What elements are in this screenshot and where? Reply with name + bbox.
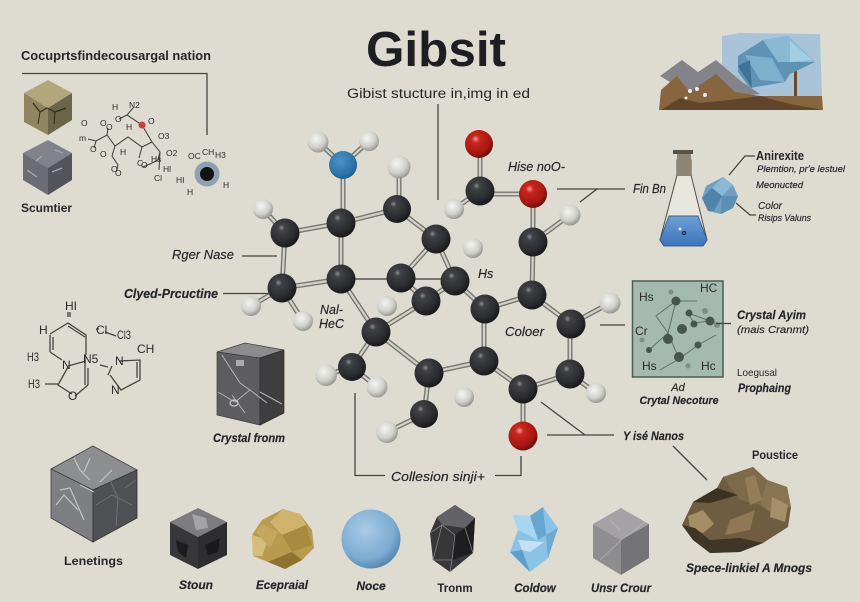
nitrogen atom <box>329 151 357 179</box>
subtitle with leader line: Gibist stucture in,img in ed <box>347 86 530 101</box>
mineral: blue crystal <box>510 507 558 572</box>
diagram: structural formula <box>79 100 178 183</box>
label: Ad Crytal Necoture: Ad <box>670 382 686 394</box>
diagram: structural formula: H <box>112 102 118 112</box>
title: Gibsit <box>366 23 506 77</box>
label: Lenetings: Lenetings <box>64 554 123 568</box>
diagram: structural formula: O <box>90 144 97 154</box>
label: Rger Nase: Rger Nase <box>172 247 234 262</box>
icon: laboratory flask <box>660 150 707 246</box>
diagram: central molecule <box>241 130 620 450</box>
diagram: structural formula: O <box>100 149 107 159</box>
label: Loegusal Prophaing: Prophaing <box>738 383 791 395</box>
leader line to diagram <box>600 324 625 326</box>
label: Y ist Nanos with leaders <box>541 402 707 480</box>
label: Coldow: Coldow <box>514 583 557 595</box>
label: Tronm: Tronm <box>437 583 473 595</box>
panel: molecular crystal diagram: HC <box>700 281 718 295</box>
label: Poustice: Poustice <box>752 450 798 462</box>
panel: molecular crystal diagram: Hs <box>639 290 654 304</box>
icon: dark atom with labels: H3 <box>215 150 226 160</box>
leader line to Fin Bn <box>557 189 625 202</box>
label: Scumtier: Scumtier <box>21 201 72 215</box>
label: Noce: Noce <box>356 579 386 593</box>
label: Crystal Ayim: (mais Cranmt) <box>737 324 809 336</box>
diagram: structural formula: O <box>81 118 88 128</box>
panel: left structural formula: N <box>111 383 120 397</box>
mineral: blue sphere <box>342 510 400 568</box>
label: Coloer: Coloer <box>505 324 545 339</box>
diagram: structural formula: O2 <box>166 148 178 158</box>
panel: molecular crystal diagram: Cr <box>635 324 648 338</box>
labels: mineral properties: Color <box>758 200 782 212</box>
icon: dark atom with labels: H <box>223 180 229 190</box>
diagram: structural formula: Hs <box>151 154 161 164</box>
mineral: dark cube <box>170 508 227 569</box>
diagram: structural formula: N2 <box>129 100 140 110</box>
label: Collesion sinji+ with bracket: Collesion sinji+ <box>391 469 485 484</box>
diagram: structural formula: H <box>126 122 132 132</box>
panel: left structural formula: O <box>68 389 77 403</box>
icon: grey mineral cube <box>23 140 72 195</box>
diagram: structural formula: O <box>106 122 113 132</box>
labels: mineral properties: Anirexite <box>756 149 804 163</box>
panel: left structural formula: H3 <box>27 350 39 364</box>
panel: left structural formula: N <box>62 358 71 372</box>
diagram: structural formula: H <box>120 147 126 157</box>
icon: tan mineral cube <box>24 80 72 135</box>
icon: dark atom with labels: H <box>187 187 193 197</box>
label: Fin Bn: Fin Bn <box>633 182 666 196</box>
diagram: structural formula: O <box>115 114 122 124</box>
labels: mineral properties: Plemtion, pr'e lestuel <box>757 164 846 175</box>
label: Ecepraial: Ecepraial <box>256 580 309 592</box>
label: Nal-HeC: Nal- <box>320 303 343 317</box>
panel: molecular crystal diagram: Hc <box>701 359 716 373</box>
label: Hs: Hs <box>478 267 493 281</box>
label: Collesion sinji+ with bracket <box>355 393 521 484</box>
bonds <box>251 141 610 436</box>
diagram: structural formula: O <box>111 164 118 174</box>
icon: dark atom with labels: HI <box>176 175 184 185</box>
icon: blue crystal tree <box>738 36 815 88</box>
mineral: grey hexagonal cube <box>593 508 649 575</box>
hydrogen atoms <box>241 131 620 443</box>
panel: molecular crystal diagram <box>632 281 723 377</box>
label: Stoun: Stoun <box>179 578 213 592</box>
heading: composition <box>21 49 211 135</box>
label: Loegusal Prophaing <box>737 367 791 395</box>
panel: left structural formula: Cl3 <box>117 328 131 342</box>
icon: dark atom with labels: OC <box>188 151 201 161</box>
label: Unsr Crour: Unsr Crour <box>591 583 652 595</box>
label: Crystal Ayim <box>737 308 809 336</box>
mineral: dark crystal <box>430 505 475 572</box>
diagram: structural formula: O <box>148 116 155 126</box>
diagram: structural formula: Hl <box>163 164 171 174</box>
label: Clyed-Prucutine: Clyed-Prcuctine <box>124 287 218 301</box>
diagram: structural formula: C <box>137 158 143 168</box>
diagram: structural formula: O <box>141 160 148 170</box>
label: Hise noO-: Hise noO- <box>508 159 566 174</box>
label: Nal-HeC: HeC <box>319 317 345 331</box>
panel: top-right landscape illustration <box>659 33 823 110</box>
panel: left structural formula: N <box>115 354 124 368</box>
label: Spece-linkiel A Mnogs: Spece-linkiel A Mnogs <box>686 561 812 575</box>
labels: mineral properties: Risips Valuns <box>758 213 811 224</box>
label: Y ist Nanos with leaders: Y isé Nanos <box>623 431 684 443</box>
panel: left structural formula: H3 <box>28 377 40 391</box>
carbon atoms <box>268 176 586 428</box>
label: Ad Crytal Necoture: Crytal Necoture <box>640 395 718 407</box>
panel: left structural formula: HI <box>65 299 77 313</box>
diagram: structural formula: O3 <box>158 131 170 141</box>
panel: left structural formula: Cl <box>96 323 107 337</box>
labels: mineral properties: Meonucted <box>756 180 804 191</box>
panel: top-left composition <box>21 49 229 215</box>
panel: left structural formula: N5 <box>83 352 99 366</box>
icon: blue mineral <box>702 177 738 214</box>
mineral: large brown rock <box>682 467 791 553</box>
icon: crystal form cube <box>217 343 284 425</box>
leader line to Crystal Ayim <box>716 322 731 324</box>
diagram: structural formula: O <box>100 118 107 128</box>
diagram: structural formula: Cl <box>154 173 162 183</box>
label: Crystal Ayim: Crystal Ayim <box>737 308 806 322</box>
label: Rger Nase <box>172 247 277 262</box>
diagram: structural formula: m <box>79 133 86 143</box>
label: Loegusal Prophaing: Loegusal <box>737 367 777 379</box>
labels: mineral properties <box>729 149 846 224</box>
mineral: gold rock <box>252 509 314 569</box>
panel: left structural formula: CH <box>137 342 154 356</box>
label: Ad Crytal Necoture <box>640 382 718 407</box>
label: Crystal form: Crystal fronm <box>213 431 285 445</box>
icon: dark atom with labels: CH <box>202 147 214 157</box>
panel: left structural formula <box>27 299 154 403</box>
mineral: large grey cube <box>51 446 137 542</box>
panel: left structural formula: H <box>39 323 48 337</box>
heading: composition: Cocuprtsfindecousargal nation <box>21 49 211 63</box>
diagram: structural formula: O <box>115 168 122 178</box>
icon: dark atom with labels <box>176 147 229 197</box>
panel: molecular crystal diagram: Hs <box>642 359 657 373</box>
oxygen atoms <box>465 130 547 450</box>
